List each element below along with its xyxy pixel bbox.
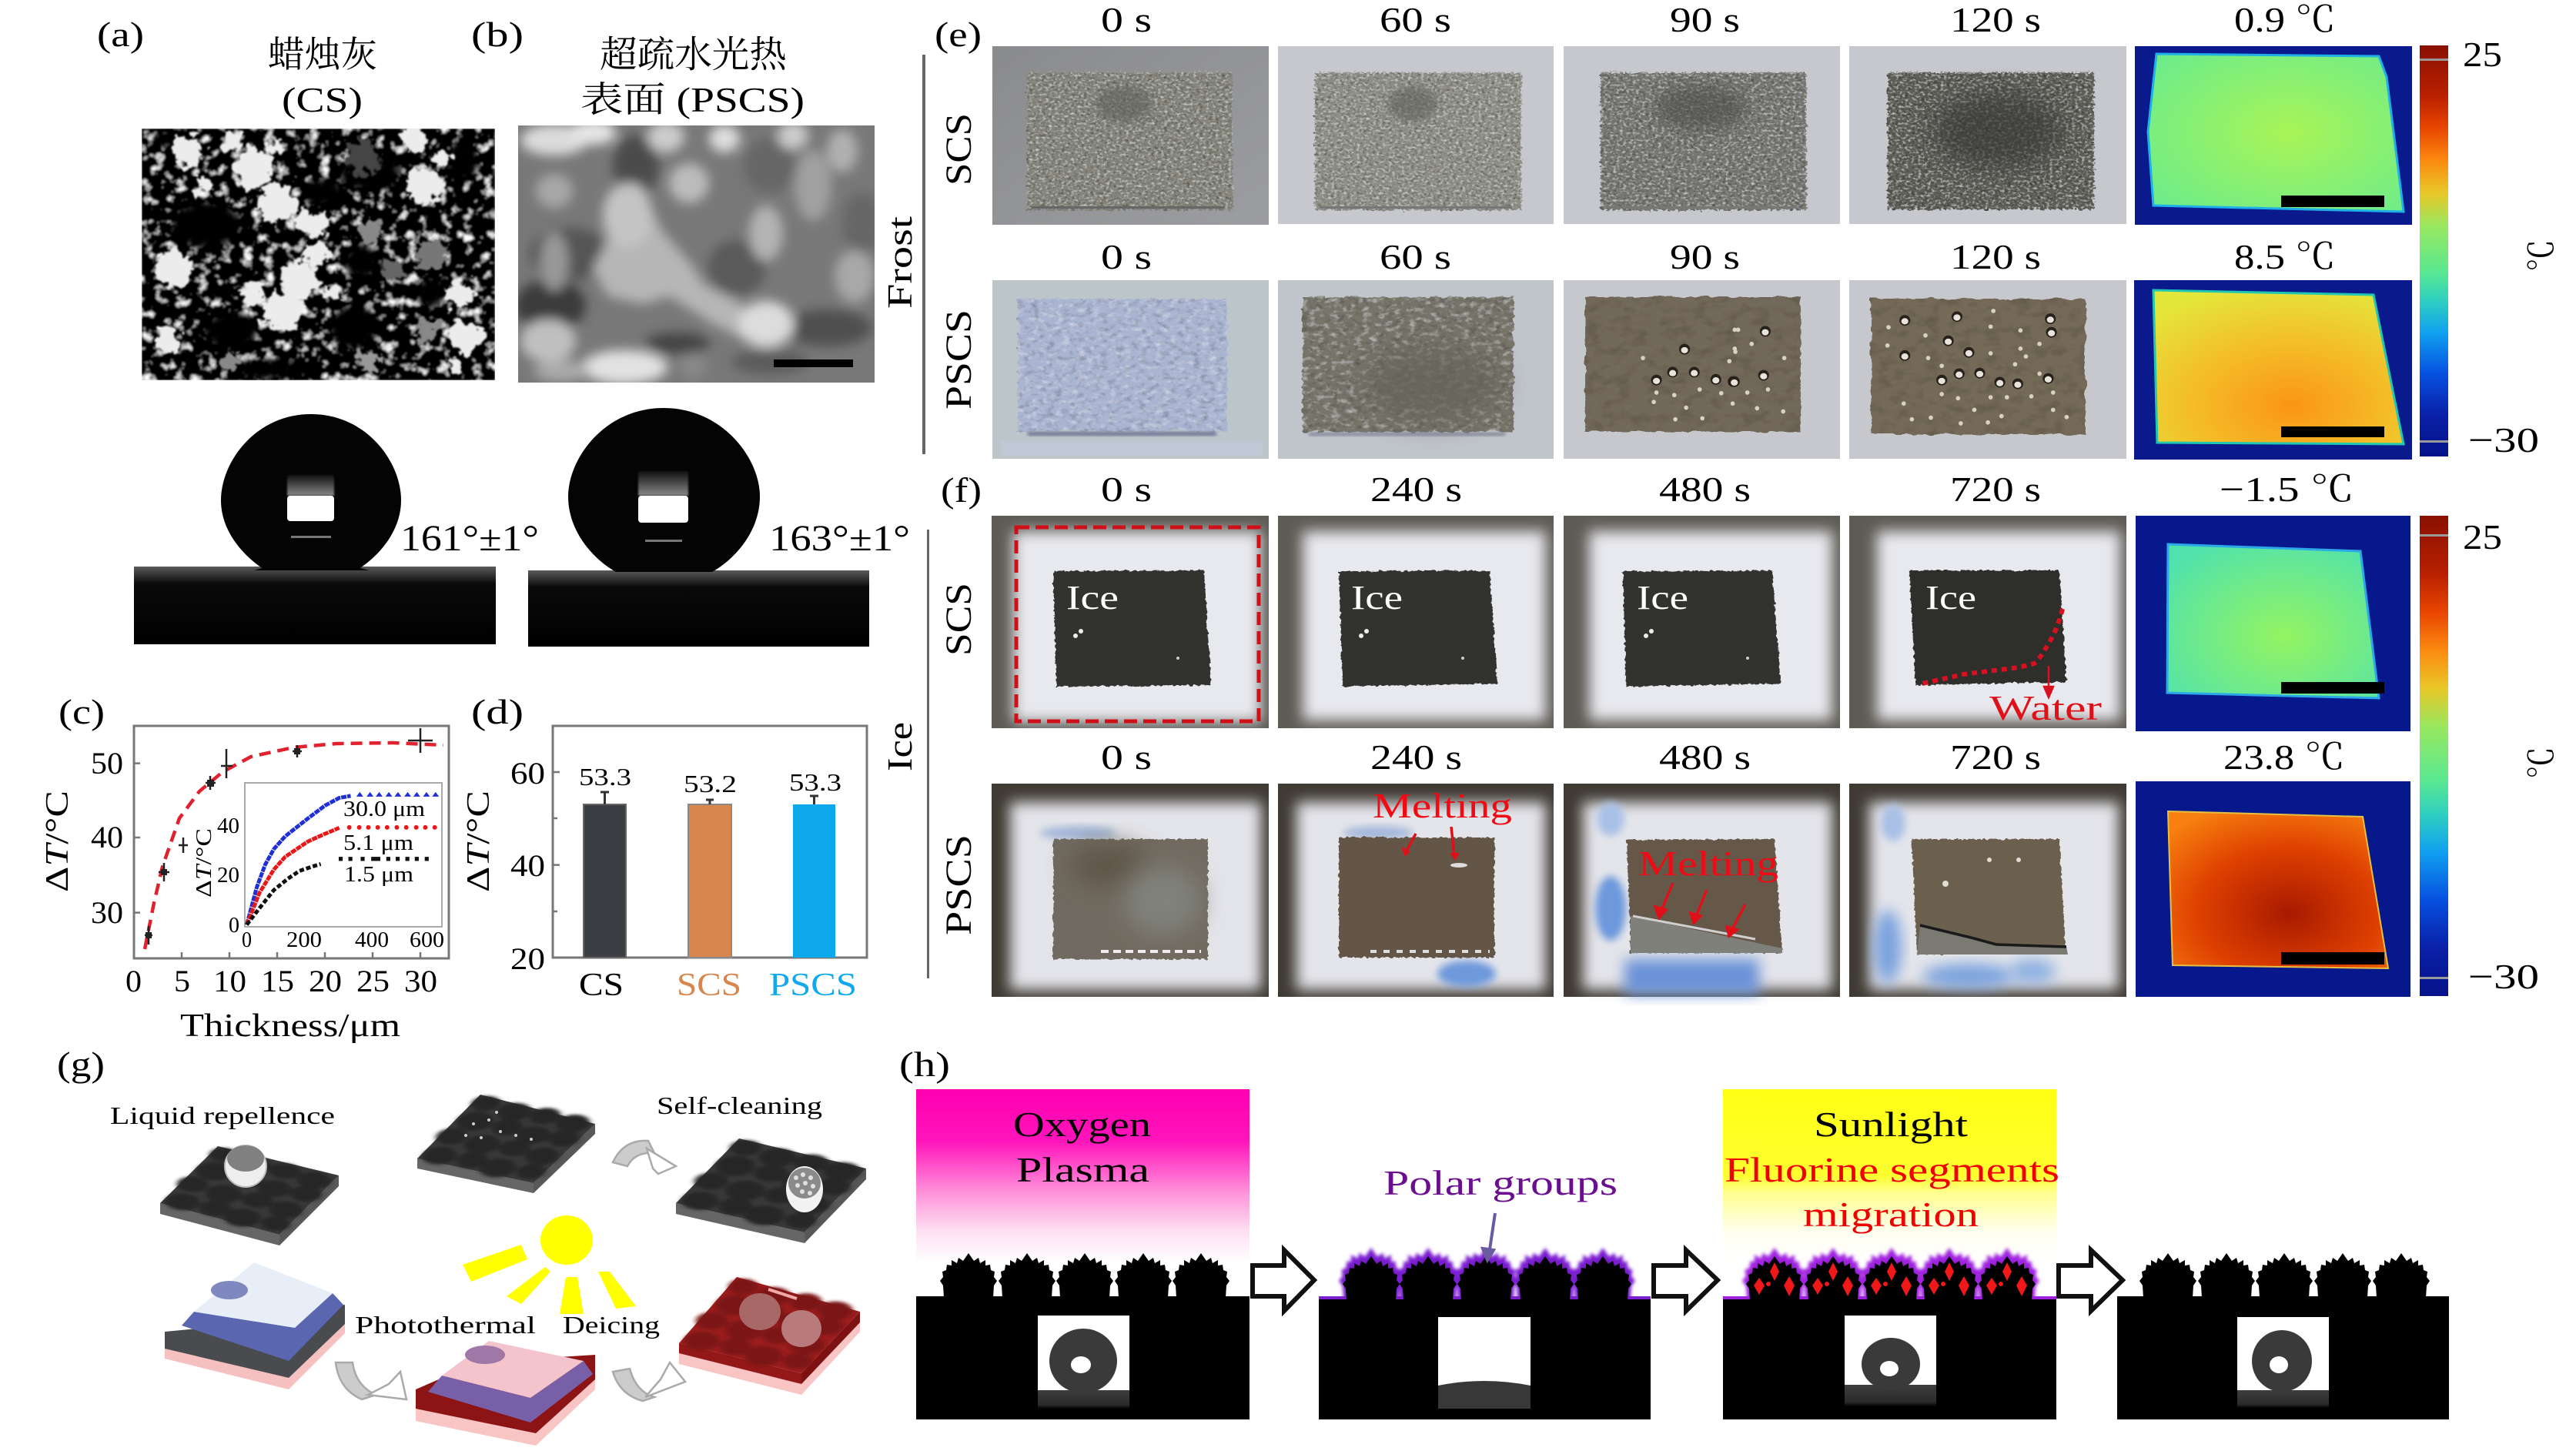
bar: SCS [684, 770, 737, 958]
contact angle image: CS [134, 414, 496, 644]
row label: Frost [880, 55, 925, 454]
category labels [579, 968, 857, 1003]
schematic: liquid repellence block [154, 1144, 341, 1245]
side labels SCS / PSCS: PSCS [938, 309, 979, 410]
x tick labels: 20 [309, 964, 342, 998]
chart: temperature rise vs thickness [40, 726, 449, 1044]
thermal image: ice PSCS [2136, 781, 2410, 997]
time labels: ice SCS [1101, 470, 2354, 509]
time labels: frost SCS: 90 s [1670, 0, 1740, 39]
photo: frost SCS 60 s [1278, 46, 1554, 224]
text: Oxygen Plasma: Plasma [1016, 1150, 1149, 1189]
photo: frost SCS 120 s [1849, 46, 2126, 224]
x tick labels: 30 [404, 964, 437, 998]
inset legend labels: 5.1 μm [343, 831, 413, 855]
label: Water: Water [1989, 688, 2102, 727]
pointer arrow [1483, 1213, 1495, 1260]
label: Polar groups: Polar groups [1383, 1163, 1618, 1202]
melting arrows [1407, 827, 1454, 856]
fit curve [145, 743, 443, 949]
side labels SCS / PSCS [938, 113, 979, 935]
colour bar: ice [2420, 516, 2561, 996]
inset legend labels: 1.5 μm [344, 863, 413, 887]
contact angle inset [1845, 1316, 1936, 1406]
photo: ice SCS 0 s [992, 516, 1269, 728]
label: Liquid repellence: Liquid repellence [110, 1102, 335, 1129]
colour bar: ice: 25 [2463, 517, 2502, 557]
time labels: ice PSCS: 0 s [1101, 737, 1152, 777]
text: Fluorine segments migration [1725, 1150, 2059, 1234]
time labels: frost SCS [1101, 0, 2336, 39]
panel label (e): (e) [935, 15, 982, 54]
inset axis labels: 600 [410, 928, 444, 952]
bar: CS [579, 763, 631, 958]
label: Ice: Ice [1925, 579, 1976, 617]
inset axis labels: 400 [355, 928, 389, 952]
label: Ice: Ice [1066, 579, 1119, 617]
x tick labels: 10 [213, 964, 246, 998]
SEM image: PSCS [515, 120, 882, 384]
cycle arrow: top [613, 1141, 676, 1174]
colour bar: frost: ℃ [2523, 239, 2561, 272]
arrow: stage 2 to 3 [1654, 1250, 1718, 1311]
inset axis labels: 40 [217, 814, 239, 838]
time labels: frost PSCS: 120 s [1950, 237, 2041, 276]
label: Ice: Ice [1637, 579, 1688, 617]
stage 1: oxygen plasma [916, 1089, 1250, 1419]
fluorine segments [1754, 1262, 2027, 1296]
red dashed selection box [1016, 527, 1259, 721]
colour bar: frost: −30 [2468, 420, 2539, 460]
contact angle value: PSCS: 163°±1° [769, 518, 910, 559]
y tick labels: 30 [91, 895, 123, 930]
contact angle inset [1438, 1317, 1531, 1409]
inset chart [192, 783, 444, 952]
bar: PSCS [789, 768, 841, 958]
category labels: PSCS [769, 968, 857, 1003]
y tick labels: 50 [91, 746, 123, 781]
panel label (g): (g) [57, 1045, 105, 1084]
schematic: frozen block [165, 1262, 345, 1389]
inset axis labels: 200 [286, 928, 322, 952]
time labels: frost SCS: 60 s [1380, 0, 1451, 39]
stage 2: polar groups [1319, 1163, 1651, 1419]
bar chart: temperature rise by sample [461, 726, 867, 1003]
colour bar: ice: −30 [2468, 957, 2539, 996]
panel label (f): (f) [941, 470, 982, 510]
thermal image: frost PSCS [2134, 280, 2412, 460]
label: Self-cleaning: Self-cleaning [657, 1092, 822, 1119]
y axis title: ΔT/°C [461, 791, 497, 892]
time labels: ice PSCS: 720 s [1950, 737, 2041, 777]
melt front dotted line [1922, 609, 2062, 684]
panel label (h): (h) [899, 1045, 950, 1084]
data points with error bars [145, 728, 433, 944]
photo: frost PSCS 120 s [1849, 280, 2126, 459]
photo: frost PSCS 90 s [1564, 280, 1840, 459]
time labels: ice SCS: −1.5 ℃ [2220, 470, 2354, 509]
x tick labels: 0 [125, 964, 142, 998]
photo: ice SCS 720 s [1849, 516, 2126, 728]
row label: Ice [880, 530, 929, 978]
photo: ice PSCS 480 s [1564, 784, 1840, 997]
arrow to water [2044, 666, 2053, 697]
side labels SCS / PSCS: SCS [938, 113, 979, 186]
colour bar: ice: ℃ [2523, 747, 2561, 779]
thermal image: ice SCS [2136, 516, 2410, 731]
contact angle value: CS: 161°±1° [400, 518, 539, 559]
inset axis labels [192, 814, 444, 952]
y tick labels [510, 756, 545, 976]
time labels: ice PSCS: 480 s [1659, 737, 1751, 777]
bar: PSCS: 53.3 [789, 768, 841, 796]
axis ticks [134, 764, 420, 958]
time labels: frost PSCS: 60 s [1380, 237, 1451, 276]
side labels SCS / PSCS: SCS [938, 583, 979, 656]
bar: SCS: 53.2 [684, 770, 737, 797]
bar: CS: 53.3 [579, 763, 631, 791]
icon: sun with rays [463, 1215, 636, 1314]
inset axis labels: 0 [229, 914, 239, 938]
heading: candle soot: 蜡烛灰 [268, 35, 377, 75]
cycle arrow: lower left [336, 1362, 406, 1399]
melting arrows [1655, 883, 1745, 936]
inset axis labels: 20 [217, 864, 239, 888]
SEM image: candle soot [142, 125, 495, 380]
side labels SCS / PSCS: PSCS [938, 834, 979, 935]
heading: candle soot: (CS) [282, 80, 363, 119]
panel label (c): (c) [59, 692, 105, 731]
x tick labels: 5 [174, 964, 190, 998]
heading: PSCS: 表面 (PSCS) [580, 80, 805, 119]
stage 3: sunlight [1723, 1089, 2059, 1419]
schematic: self-cleaning block [670, 1136, 871, 1243]
schematic: heated frozen block [416, 1341, 595, 1446]
photo: ice SCS 480 s [1564, 516, 1840, 728]
time labels: ice SCS: 0 s [1101, 470, 1152, 509]
y axis title: ΔT/°C [40, 791, 75, 892]
melted lower corner [1631, 916, 1782, 953]
text: Sunlight: Sunlight [1814, 1105, 1968, 1144]
contact angle inset [2237, 1317, 2329, 1408]
label: Photothermal: Photothermal [355, 1311, 536, 1339]
time labels: ice SCS: 240 s [1370, 470, 1462, 509]
time labels: frost PSCS: 0 s [1101, 237, 1152, 276]
inset axis labels: 0 [242, 928, 252, 952]
text: Oxygen Plasma [1013, 1105, 1151, 1189]
inset legend labels [343, 797, 425, 887]
time labels: frost SCS: 0 s [1101, 0, 1152, 39]
photo: ice PSCS 240 s [1278, 784, 1554, 997]
heading: candle soot [268, 35, 377, 119]
photo: frost PSCS 60 s [1278, 280, 1554, 459]
contact angle inset [1038, 1316, 1129, 1409]
row label: Frost: Frost [880, 216, 919, 309]
time labels: ice SCS: 720 s [1950, 470, 2041, 509]
row label: Ice: Ice [880, 722, 919, 771]
photo: frost SCS 0 s [992, 46, 1269, 225]
schematic: contaminated block [411, 1092, 601, 1193]
time labels: ice PSCS [1101, 737, 2345, 777]
colour bar: frost: 25 [2463, 35, 2502, 74]
x tick labels: 25 [356, 964, 390, 998]
label: Melting: Melting [1373, 786, 1512, 825]
x tick labels: 15 [261, 964, 294, 998]
panel label (b): (b) [471, 15, 524, 54]
photo: ice PSCS 0 s [992, 784, 1269, 997]
label: Melting: Melting [1638, 844, 1778, 883]
photo: frost SCS 90 s [1564, 46, 1840, 224]
category labels: CS [579, 968, 624, 1003]
label: Deicing: Deicing [563, 1311, 660, 1339]
time labels: ice SCS: 480 s [1659, 470, 1751, 509]
panel label (d): (d) [471, 692, 524, 731]
time labels: frost PSCS: 8.5 ℃ [2234, 237, 2336, 276]
time labels: frost PSCS: 90 s [1670, 237, 1740, 276]
thermal image: frost SCS [2135, 46, 2412, 225]
time labels: frost SCS: 0.9 ℃ [2234, 0, 2336, 39]
y tick labels: 40 [91, 820, 123, 854]
y tick labels: 40 [510, 848, 545, 883]
colour bar: frost [2420, 35, 2561, 460]
panel label (a): (a) [97, 15, 144, 54]
inset axis labels: ΔT/°C [192, 828, 216, 898]
category labels: SCS [677, 968, 741, 1003]
x axis title: Thickness/μm [180, 1008, 400, 1044]
contact angle image: PSCS [528, 408, 869, 647]
text: Oxygen Plasma: Oxygen [1013, 1105, 1151, 1144]
text: Fluorine segments migration: Fluorine segments [1725, 1150, 2059, 1189]
schematic: deicing block [673, 1275, 863, 1395]
x tick labels [125, 964, 437, 998]
label: Ice: Ice [1351, 579, 1403, 617]
heading: PSCS: 超疏水光热 [600, 35, 788, 75]
arrow: stage 1 to 2 [1253, 1250, 1314, 1311]
stage 4: recovered surface [2117, 1253, 2449, 1419]
y tick labels: 20 [510, 941, 545, 976]
photo: ice PSCS 720 s [1849, 784, 2126, 997]
y tick labels [91, 746, 123, 930]
inset legend labels: 30.0 μm [343, 797, 425, 821]
cycle arrow: lower right [613, 1362, 685, 1401]
y tick labels: 60 [510, 756, 545, 791]
time labels: ice PSCS: 23.8 ℃ [2223, 737, 2345, 777]
time labels: ice PSCS: 240 s [1370, 737, 1462, 777]
text: Fluorine segments migration: migration [1803, 1195, 1979, 1234]
heading: PSCS [580, 35, 805, 119]
arrow: stage 3 to 4 [2059, 1250, 2123, 1311]
photo: frost PSCS 0 s [992, 280, 1269, 459]
photo: ice SCS 240 s [1278, 516, 1554, 728]
time labels: frost SCS: 120 s [1950, 0, 2041, 39]
time labels: frost PSCS [1101, 237, 2336, 276]
